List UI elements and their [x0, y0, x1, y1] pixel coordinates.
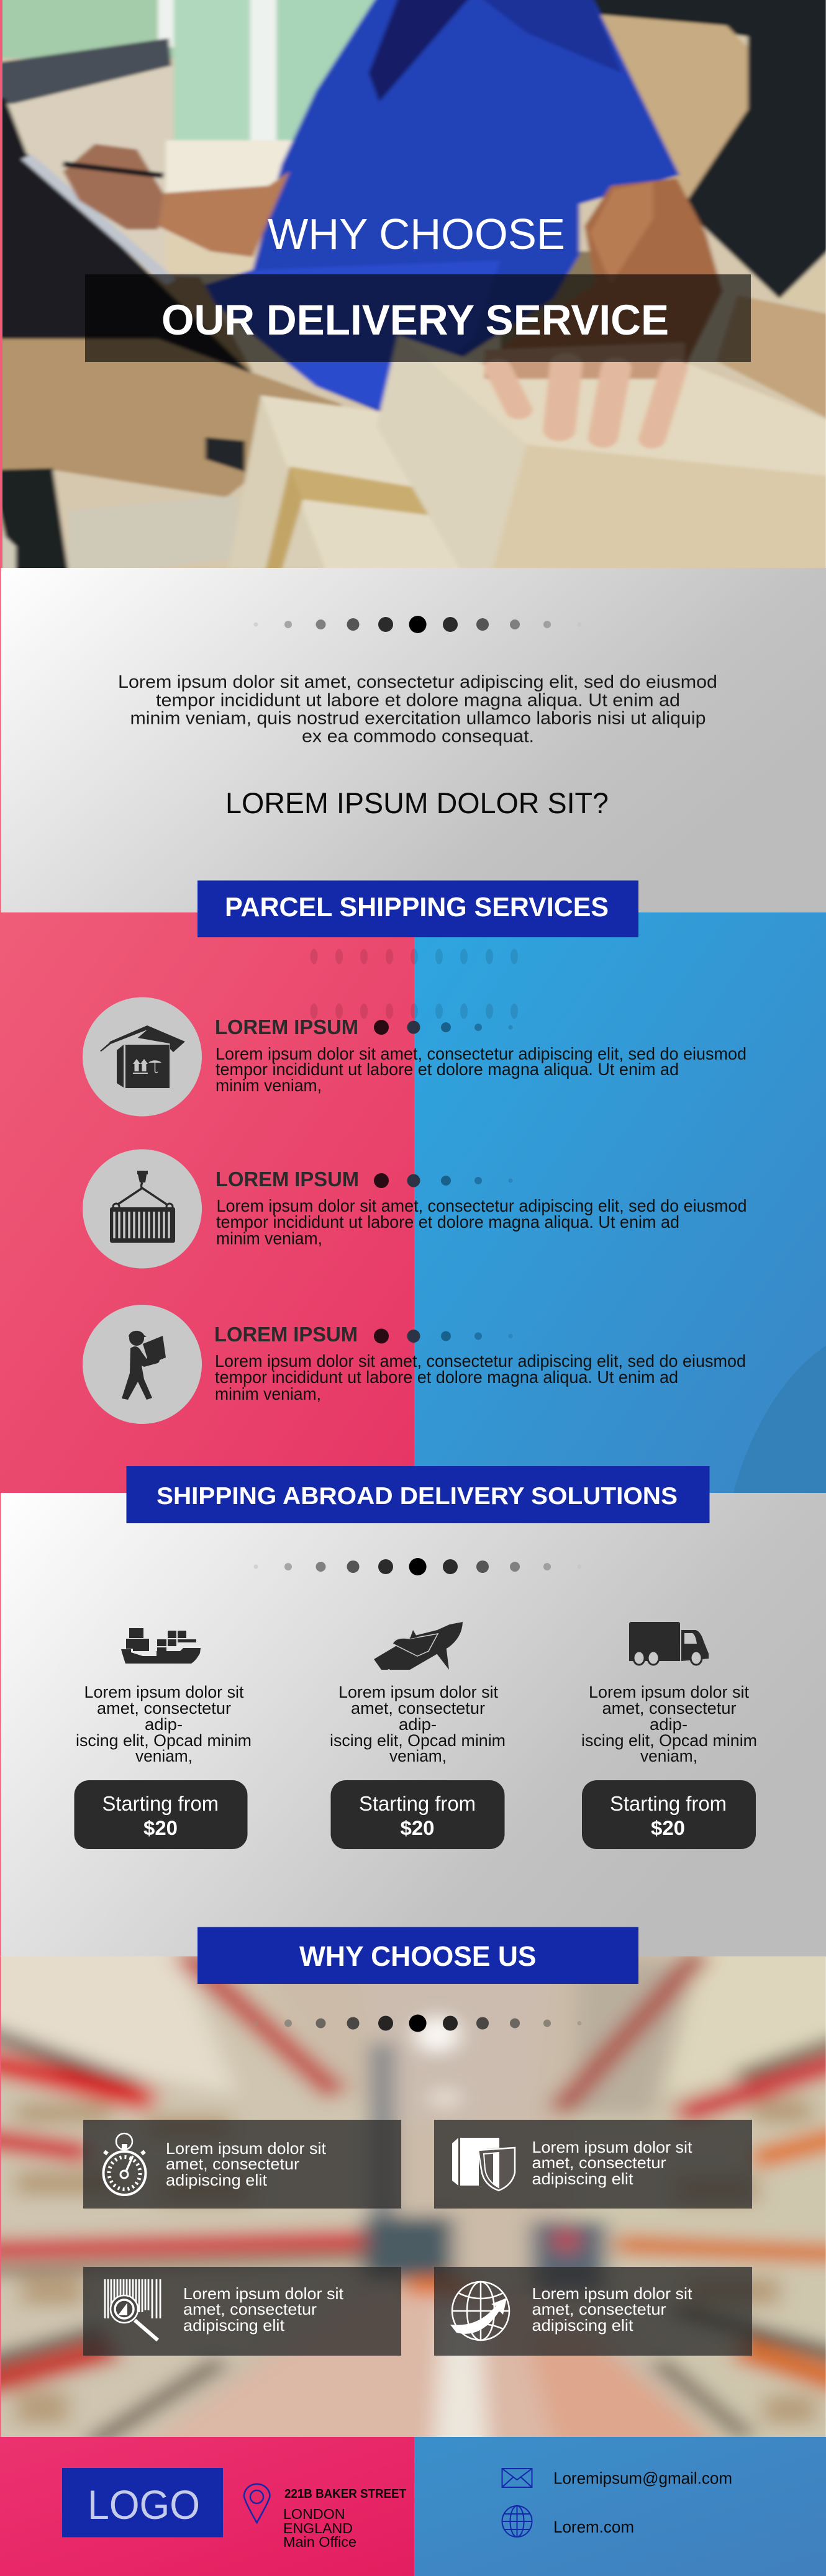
price button: Starting from	[359, 1792, 476, 1815]
banner: parcel shipping services: PARCEL SHIPPING SERVICES	[225, 892, 609, 922]
card: global reach	[434, 2267, 752, 2356]
dots	[374, 1328, 513, 1343]
hero photo: courier with parcels	[0, 0, 826, 579]
description: tempor incididunt ut labore et dolore magna aliqua. Ut enim ad	[215, 1367, 678, 1387]
text	[76, 1683, 252, 1765]
website: Lorem.com	[553, 2518, 634, 2536]
description: minim veniam,	[216, 1076, 322, 1095]
icon: open box	[100, 1025, 185, 1088]
intro paragraph: ex ea commodo consequat.	[302, 726, 534, 746]
text	[532, 2284, 692, 2335]
text	[532, 2138, 692, 2188]
text: amet, consectetur	[602, 1699, 737, 1718]
intro paragraph	[118, 672, 717, 746]
icon: cargo ship	[121, 1628, 201, 1664]
heading: LOREM IPSUM	[215, 1016, 358, 1038]
panel: why choose us	[0, 1929, 826, 2462]
icon: delivery worker	[122, 1331, 166, 1400]
card: tracking	[83, 2267, 401, 2356]
address	[283, 2487, 406, 2550]
icon: envelope	[502, 2469, 532, 2487]
dot divider	[253, 1558, 581, 1575]
email: Loremipsum@gmail.com	[553, 2469, 732, 2488]
address: LONDON	[283, 2506, 345, 2522]
hero panel	[0, 0, 826, 579]
icon: crane container	[110, 1171, 175, 1243]
text: amet, consectetur	[351, 1699, 485, 1718]
title: our delivery service: OUR DELIVERY SERVICE	[161, 296, 669, 344]
text: adipiscing elit	[183, 2316, 285, 2335]
text: iscing elit, Opcad minim	[76, 1731, 252, 1750]
text: adipiscing elit	[532, 2169, 633, 2188]
icon: airplane	[374, 1622, 463, 1670]
dot divider	[253, 2015, 581, 2032]
column: sea freight	[75, 1628, 252, 1849]
dots	[374, 1020, 513, 1035]
dot divider	[253, 616, 581, 633]
text	[581, 1683, 757, 1765]
service row 1	[83, 997, 747, 1116]
panel: introduction	[0, 568, 826, 912]
text: adip-	[145, 1715, 183, 1734]
footer	[0, 2437, 826, 2576]
intro paragraph: Lorem ipsum dolor sit amet, consectetur adipiscing elit, sed do eiusmod	[118, 672, 717, 692]
text: Lorem ipsum dolor sit	[84, 1683, 244, 1701]
text: veniam,	[389, 1747, 447, 1765]
panel: shipping abroad solutions	[0, 1493, 826, 1957]
text: adip-	[399, 1715, 437, 1734]
decorative curve	[733, 1346, 826, 1493]
dots	[374, 1173, 513, 1188]
description	[215, 1351, 746, 1403]
icon: globe with arrow	[450, 2282, 509, 2340]
price button: $20	[651, 1817, 685, 1839]
text: Lorem ipsum dolor sit	[166, 2139, 327, 2158]
text: amet, consectetur	[166, 2155, 299, 2173]
text	[330, 1683, 506, 1765]
description	[216, 1196, 747, 1248]
banner: why choose us	[197, 1927, 638, 1984]
banner: shipping abroad: SHIPPING ABROAD DELIVERY SOLUTIONS	[157, 1483, 678, 1510]
address: Main Office	[283, 2534, 356, 2550]
heading: LOREM IPSUM	[216, 1168, 359, 1191]
price button	[75, 1780, 247, 1849]
ghost dot rows	[311, 948, 518, 1019]
description: minim veniam,	[215, 1384, 321, 1403]
price button	[582, 1780, 756, 1849]
price button: $20	[400, 1817, 435, 1839]
description: Lorem ipsum dolor sit amet, consectetur adipiscing elit, sed do eiusmod	[215, 1351, 746, 1371]
text: amet, consectetur	[532, 2300, 666, 2318]
title band	[85, 274, 751, 362]
left edge stripe	[0, 0, 2, 568]
text: Lorem ipsum dolor sit	[532, 2284, 692, 2303]
service row 2	[83, 1150, 747, 1269]
question heading: LOREM IPSUM DOLOR SIT?	[225, 786, 609, 819]
heading: LOREM IPSUM	[214, 1323, 358, 1346]
text: veniam,	[135, 1747, 193, 1765]
price button: Starting from	[610, 1792, 727, 1815]
warehouse photo	[0, 1929, 826, 2462]
logo: LOGO	[88, 2482, 200, 2528]
text: Lorem ipsum dolor sit	[183, 2284, 344, 2303]
text: adipiscing elit	[532, 2316, 633, 2335]
icon: truck	[629, 1622, 709, 1665]
text	[183, 2284, 344, 2335]
price button: Starting from	[102, 1792, 219, 1815]
icon: shield	[452, 2138, 515, 2191]
description	[216, 1044, 747, 1095]
text	[166, 2139, 327, 2189]
text: iscing elit, Opcad minim	[330, 1731, 506, 1750]
column: air freight	[330, 1622, 506, 1849]
intro paragraph: tempor incididunt ut labore et dolore magna aliqua. Ut enim ad	[156, 690, 680, 710]
card: speed	[83, 2120, 401, 2209]
panel: parcel shipping services	[0, 912, 826, 1493]
description: tempor incididunt ut labore et dolore magna aliqua. Ut enim ad	[216, 1212, 679, 1232]
text: veniam,	[640, 1747, 697, 1765]
text: amet, consectetur	[97, 1699, 231, 1718]
column: road freight	[581, 1622, 757, 1849]
text: Lorem ipsum dolor sit	[338, 1683, 498, 1701]
icon: barcode magnifier	[105, 2279, 160, 2340]
price button: $20	[143, 1817, 178, 1839]
price button	[330, 1780, 504, 1849]
icon: map pin	[244, 2484, 270, 2523]
description: Lorem ipsum dolor sit amet, consectetur adipiscing elit, sed do eiusmod	[216, 1044, 747, 1063]
text: Lorem ipsum dolor sit	[532, 2138, 692, 2156]
description: tempor incididunt ut labore et dolore magna aliqua. Ut enim ad	[216, 1060, 679, 1079]
intro paragraph: minim veniam, quis nostrud exercitation ullamco laboris nisi ut aliquip	[130, 709, 706, 729]
text: Lorem ipsum dolor sit	[589, 1683, 749, 1701]
text: adip-	[650, 1715, 688, 1734]
text: adipiscing elit	[166, 2171, 268, 2189]
card: protection	[434, 2120, 752, 2209]
description: Lorem ipsum dolor sit amet, consectetur adipiscing elit, sed do eiusmod	[216, 1196, 747, 1215]
text: amet, consectetur	[183, 2300, 317, 2318]
icon: stopwatch	[103, 2133, 145, 2195]
logo	[62, 2468, 223, 2538]
text: iscing elit, Opcad minim	[581, 1731, 757, 1750]
banner: shipping abroad	[127, 1466, 709, 1523]
icon: web globe	[502, 2506, 532, 2537]
service row 3	[83, 1305, 746, 1424]
banner: why choose us: WHY CHOOSE US	[299, 1940, 537, 1972]
banner: parcel shipping services	[197, 880, 638, 937]
text: amet, consectetur	[532, 2153, 666, 2172]
address: ENGLAND	[283, 2520, 353, 2536]
address: 221B BAKER STREET	[284, 2487, 406, 2501]
heading: why choose: WHY CHOOSE	[268, 210, 565, 258]
description: minim veniam,	[216, 1229, 322, 1248]
